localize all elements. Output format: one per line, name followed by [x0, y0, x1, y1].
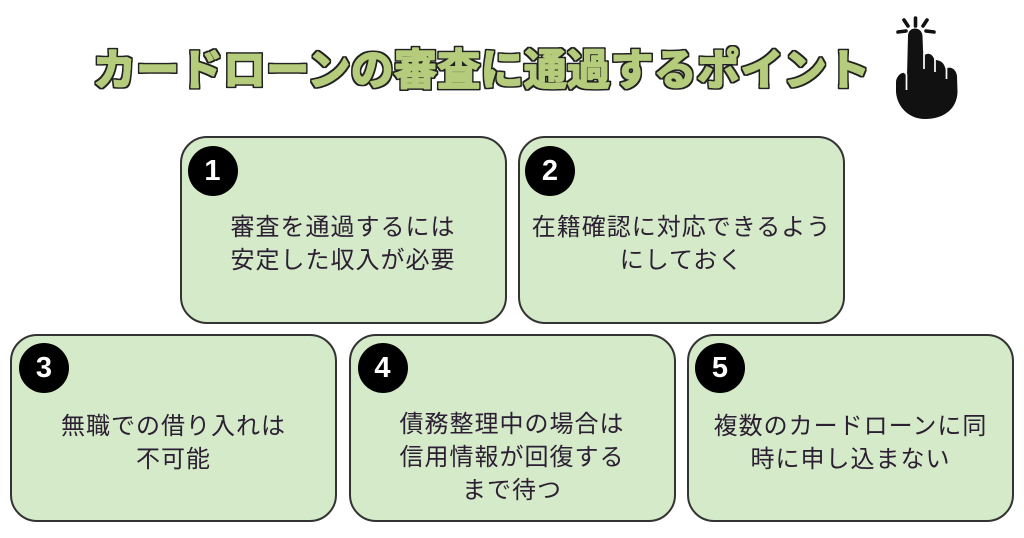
- text: card 2: 在籍確認に対応できるよう: [532, 214, 831, 241]
- title: カードローンの審査に通過するポイント: [93, 47, 870, 95]
- text: card 3: 不可能: [136, 446, 211, 472]
- panel: card 5: [687, 334, 1014, 522]
- number badge 4: [358, 342, 408, 392]
- text: card 4: 信用情報が回復する: [400, 444, 624, 471]
- text: card 1: 審査を通過するには: [230, 214, 456, 241]
- number badge 3: 3: [36, 352, 52, 384]
- text: card 1: 安定した収入が必要: [230, 247, 456, 274]
- text: card 2: にしておく: [620, 247, 743, 274]
- text: card 5: 時に申し込まない: [750, 446, 950, 472]
- panel: card 4: [348, 334, 676, 522]
- text: card 2: [532, 214, 831, 274]
- text: card 5: [714, 412, 987, 472]
- text: card 4: 債務整理中の場合は: [400, 411, 624, 438]
- panel: card 1: [180, 136, 506, 324]
- text: card 3: [61, 412, 286, 472]
- panel: card 2: [518, 136, 845, 324]
- number badge 1: [188, 146, 238, 196]
- number badge 2: 2: [542, 154, 558, 186]
- icon: pointing hand: [896, 16, 958, 119]
- text: card 1: [230, 214, 456, 274]
- number badge 5: 5: [712, 352, 728, 384]
- panel: card 3: [10, 334, 337, 522]
- text: card 4: [400, 411, 624, 504]
- text: card 4: まで待つ: [462, 477, 562, 504]
- text: card 3: 無職での借り入れは: [61, 412, 286, 440]
- number badge 5: [695, 342, 745, 392]
- number badge 1: 1: [204, 154, 221, 186]
- number badge 3: [19, 342, 69, 392]
- text: card 5: 複数のカードローンに同: [714, 412, 987, 440]
- number badge 4: 4: [374, 352, 391, 384]
- finger gaps: [923, 48, 925, 69]
- number badge 2: [525, 146, 575, 196]
